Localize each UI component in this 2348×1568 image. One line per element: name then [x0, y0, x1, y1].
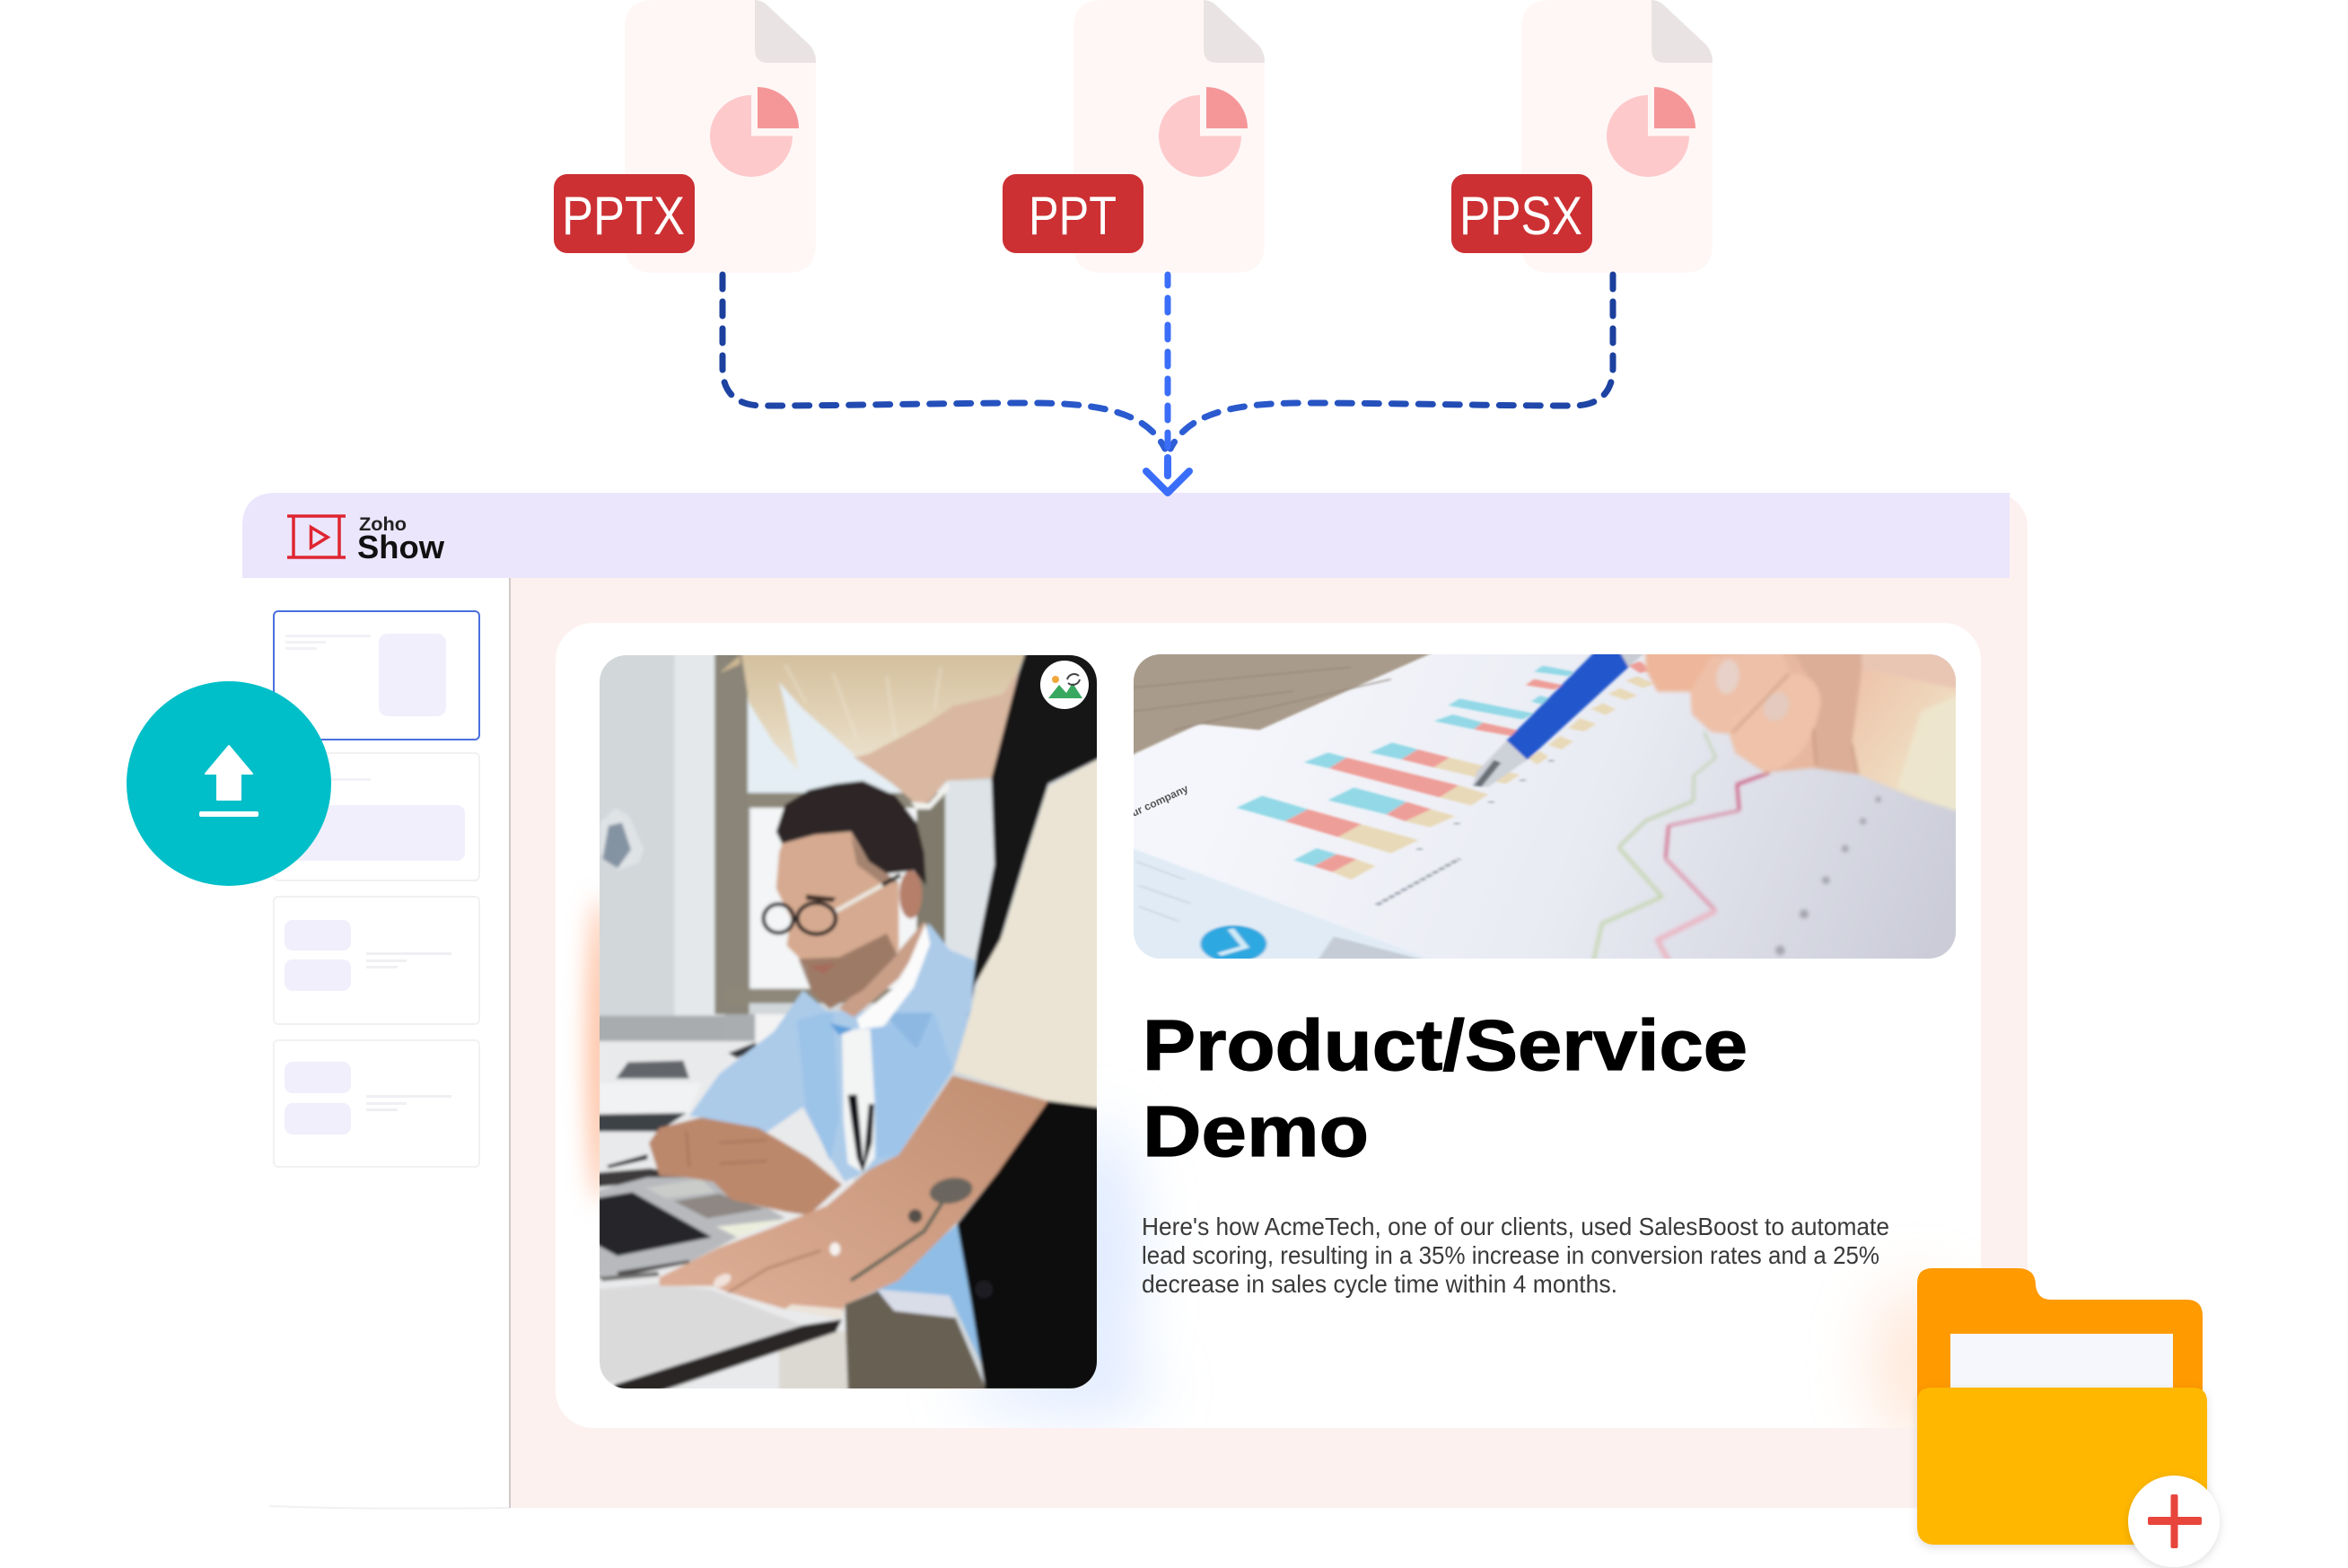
badge: PPTX: PPTX [562, 186, 685, 246]
badge: PPSX: PPSX [1459, 186, 1582, 246]
arrows: dashed connectors merging into the window [723, 275, 1613, 493]
badge: PPTX [554, 174, 695, 253]
woman's face and neck [854, 670, 1019, 805]
icon: upload button [127, 681, 331, 886]
man's hands [649, 1117, 842, 1215]
badge: PPSX [1451, 174, 1592, 253]
file icon: PPSX [1451, 0, 1713, 273]
chart lines [1593, 731, 1770, 962]
arrow head [1146, 471, 1189, 493]
blue pen [1507, 653, 1628, 760]
window panel background [242, 493, 2028, 1508]
desk and laptop [591, 1041, 854, 1400]
thumbnail 2 [274, 753, 479, 880]
file icon: PPT [1003, 0, 1265, 273]
badge: PPT [1003, 174, 1143, 253]
black vest [970, 655, 1097, 997]
woman's arm [660, 1075, 1048, 1318]
folder paper [1950, 1334, 2173, 1389]
vest lower [957, 1098, 1108, 1391]
logo: Zoho Show [287, 514, 445, 565]
hand [1713, 654, 1863, 774]
icon: folder with add button [1917, 1268, 2220, 1567]
add button [2128, 1476, 2220, 1567]
header bar [242, 493, 2010, 578]
logo: Zoho Show: Show [357, 529, 445, 565]
title [1143, 1005, 1748, 1171]
folder front [1917, 1388, 2207, 1545]
badge: PPT: PPT [1029, 186, 1117, 246]
body text [1142, 1213, 1889, 1298]
man's hair [776, 781, 926, 886]
slide sidebar [242, 578, 511, 1509]
glasses [764, 903, 836, 934]
body text: lead scoring, resulting in a 35% increase in conversion rates and a 25% [1142, 1241, 1879, 1269]
thumbnail 1 (selected) [274, 611, 479, 740]
logo: Zoho Show: Zoho [359, 514, 407, 535]
file icon: PPTX [554, 0, 816, 273]
woman's blouse [954, 754, 1108, 1108]
title: Product/Service [1143, 1005, 1748, 1085]
slide card [556, 623, 1981, 1445]
blonde hair [740, 646, 1028, 770]
app window [242, 493, 2028, 1509]
photo: two colleagues at a laptop [591, 646, 1108, 1400]
title: Demo [1143, 1091, 1369, 1171]
paper background [1134, 654, 1956, 959]
body text: decrease in sales cycle time within 4 months. [1142, 1270, 1617, 1298]
body text: Here's how AcmeTech, one of our clients, used SalesBoost to automate [1142, 1213, 1889, 1240]
photo caption fragment: ur company [1129, 782, 1190, 819]
office background [591, 646, 1108, 1394]
tattoo [851, 1175, 975, 1281]
photo: hand with pen over charts [1127, 648, 1963, 962]
man's shirt [689, 1012, 970, 1182]
closed laptop [597, 1283, 803, 1383]
man's lower shirt and trousers [875, 1223, 986, 1373]
thumbnail 3 [274, 897, 479, 1024]
man's shirt collar area [773, 923, 975, 1033]
icon: replace image badge [1040, 661, 1089, 709]
man's face [776, 832, 898, 1009]
thumbnail 4 [274, 1040, 479, 1167]
